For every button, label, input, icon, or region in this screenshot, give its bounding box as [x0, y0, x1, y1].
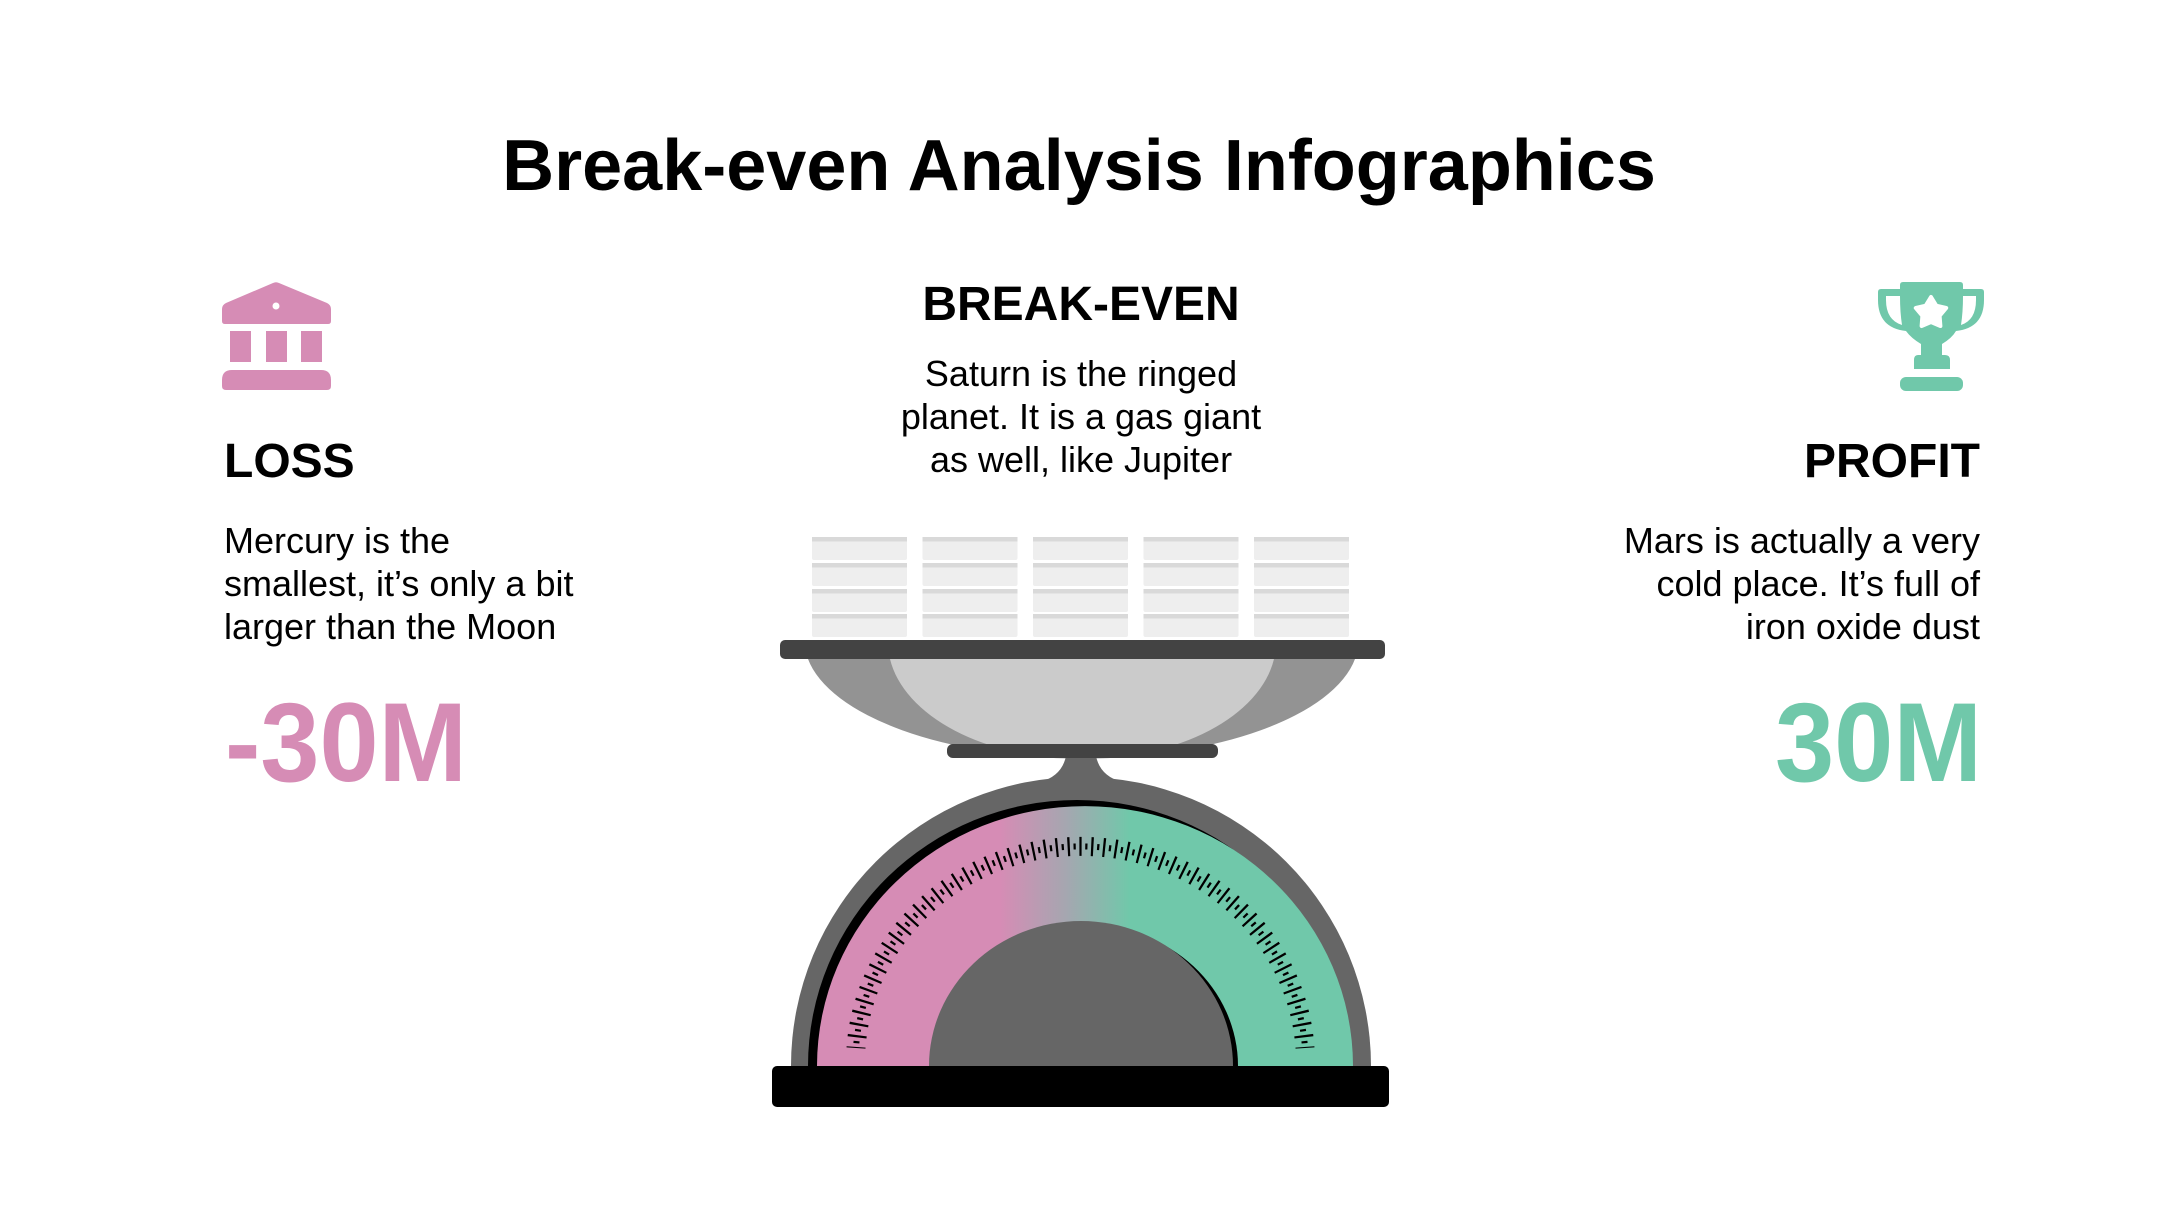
pan support bar	[947, 744, 1218, 758]
dial shadow	[808, 800, 1346, 1070]
panel: break-even	[901, 278, 1261, 480]
scale base	[772, 1066, 1389, 1107]
panel: loss	[222, 282, 573, 805]
panel: profit	[1624, 282, 1984, 805]
scale bowl	[808, 659, 1355, 759]
scale pan top bar	[780, 640, 1385, 659]
text: loss description: smallest, it’s only a bit	[224, 563, 573, 604]
dial gradient	[817, 806, 1353, 1070]
text: profit description: cold place. It’s full of	[1656, 563, 1981, 604]
heading: loss: LOSS	[224, 435, 355, 488]
icon: bank	[222, 282, 331, 390]
value: -30M: -30M	[225, 680, 467, 805]
heading: profit: PROFIT	[1804, 435, 1980, 488]
text: loss description: Mercury is the	[224, 520, 450, 561]
stacks of paper money	[812, 537, 1349, 637]
text: loss description: larger than the Moon	[224, 606, 556, 647]
title: Break-even Analysis Infographics	[502, 126, 1656, 206]
heading: break-even: BREAK-EVEN	[922, 278, 1240, 331]
text: break-even description: as well, like Jupiter	[930, 439, 1232, 480]
text: break-even description: Saturn is the ringed	[925, 353, 1237, 394]
dome body	[791, 777, 1371, 1070]
value: 30M: 30M	[1775, 680, 1982, 805]
text: profit description: iron oxide dust	[1746, 606, 1980, 647]
text: profit description: Mars is actually a very	[1624, 520, 1980, 561]
inner dome	[929, 921, 1233, 1070]
neck	[1040, 756, 1122, 782]
text: break-even description: planet. It is a gas giant	[901, 396, 1261, 437]
icon: trophy	[1878, 282, 1984, 391]
dial ticks	[856, 846, 1305, 1048]
chart: weighing scale	[772, 537, 1389, 1107]
inner dome shadow	[934, 925, 1238, 1070]
